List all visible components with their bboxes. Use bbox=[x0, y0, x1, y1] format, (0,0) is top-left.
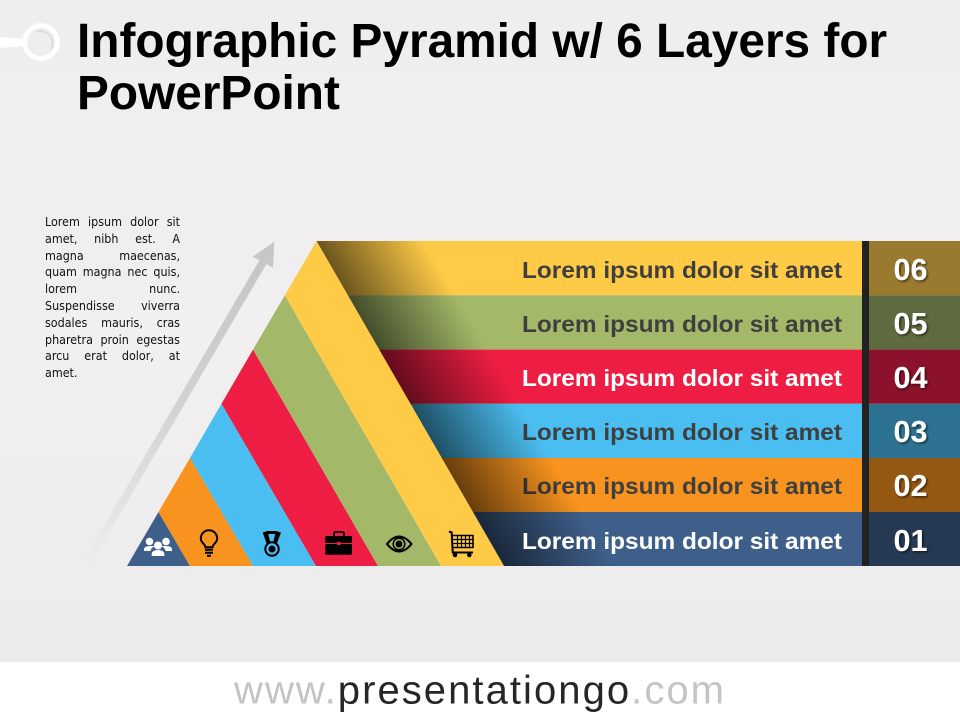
body text: Suspendisse viverra bbox=[45, 298, 180, 313]
body text: arcu erat dolor, at bbox=[45, 348, 180, 363]
bar shadow bbox=[316, 241, 862, 566]
icon: eye bbox=[387, 536, 412, 552]
bar 06: Lorem ipsum dolor sit amet bbox=[522, 257, 842, 283]
footer: www.presentationgo.com bbox=[233, 668, 724, 712]
title: PowerPoint bbox=[77, 67, 340, 120]
arrow bbox=[82, 242, 274, 568]
title bbox=[77, 15, 887, 120]
bar 03: 03 bbox=[894, 414, 928, 449]
body text: lorem nunc. bbox=[45, 281, 180, 296]
bar 02 bbox=[442, 458, 960, 512]
icon: people bbox=[144, 538, 172, 556]
bar 05: Lorem ipsum dolor sit amet bbox=[522, 311, 842, 337]
bar 06 bbox=[316, 241, 960, 295]
bar 04 bbox=[379, 350, 960, 404]
icon: cart bbox=[449, 532, 473, 557]
body text: quam magna nec quis, bbox=[45, 264, 180, 279]
bar 01 labels: 01 bbox=[894, 523, 928, 558]
body text: amet, nibh est. A bbox=[45, 231, 180, 246]
bar 02: Lorem ipsum dolor sit amet bbox=[522, 473, 842, 499]
bar 01 labels bbox=[522, 523, 928, 558]
body text: Lorem ipsum dolor sit bbox=[45, 214, 180, 229]
divider bbox=[862, 241, 869, 566]
bar 03: Lorem ipsum dolor sit amet bbox=[522, 419, 842, 445]
body text: magna maecenas, bbox=[45, 248, 180, 263]
bar 03 bbox=[410, 404, 960, 458]
icon: light bulb bbox=[201, 530, 217, 556]
footer bbox=[0, 662, 960, 720]
bar 04: 04 bbox=[894, 360, 928, 395]
pin decoration bbox=[0, 23, 60, 61]
icon: briefcase bbox=[325, 532, 352, 555]
bars bbox=[316, 241, 960, 566]
body text: sodales mauris, cras bbox=[45, 315, 180, 330]
bar 05: 05 bbox=[894, 306, 928, 341]
bar 02: 02 bbox=[894, 468, 928, 503]
bar 05 bbox=[348, 295, 960, 350]
bar 01 labels: Lorem ipsum dolor sit amet bbox=[522, 528, 842, 554]
pyramid bbox=[127, 241, 504, 566]
bar 01 bbox=[473, 512, 960, 566]
bar 04: Lorem ipsum dolor sit amet bbox=[522, 365, 842, 391]
body text: pharetra proin egestas bbox=[45, 332, 180, 347]
body text: amet. bbox=[45, 365, 77, 380]
title: Infographic Pyramid w/ 6 Layers for bbox=[77, 15, 887, 68]
bar 06: 06 bbox=[894, 252, 928, 287]
icon: medal bbox=[263, 531, 281, 556]
body text bbox=[45, 214, 180, 380]
